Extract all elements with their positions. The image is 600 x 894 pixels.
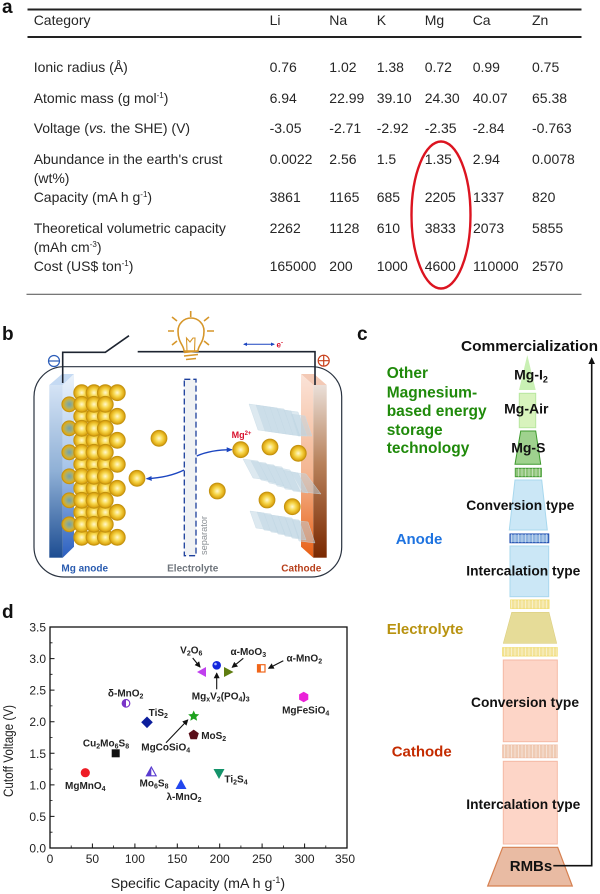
- row: volumetric capacity: 2262: [270, 220, 301, 236]
- marker labels: S: [158, 778, 165, 790]
- y axis tick labels: 3.0: [29, 652, 46, 666]
- category: Electrolyte: Electrolyte: [387, 621, 463, 638]
- marker labels: V: [180, 646, 187, 656]
- cell outline: [34, 367, 342, 577]
- green separator: [515, 468, 541, 477]
- row: cost: [34, 258, 563, 274]
- x axis tick labels: 100: [125, 852, 145, 866]
- row: capacity: 820: [532, 189, 556, 205]
- row: cost: Cost (US$ ton: [34, 258, 122, 274]
- y axis tick labels: 0.0: [29, 842, 46, 856]
- row: capacity: [34, 189, 556, 205]
- category: Anode: Anode: [396, 531, 442, 548]
- row: voltage: [34, 120, 572, 136]
- tier: Mg-I2: [519, 355, 536, 390]
- row: voltage: -2.84: [473, 120, 505, 136]
- tier labels: Mg-S: [511, 439, 545, 455]
- row: cost: 1000: [377, 258, 408, 274]
- row: atomic mass: 65.38: [532, 90, 567, 106]
- row: voltage: -2.92: [377, 120, 409, 136]
- marker labels: 2: [96, 744, 100, 750]
- marker labels: O: [191, 646, 199, 656]
- marker labels: Cu: [83, 738, 96, 750]
- table rules: [26, 8, 582, 295]
- panel label c: c: [357, 324, 368, 345]
- marker labels: 6: [154, 784, 158, 790]
- row: cost: -1: [122, 259, 129, 268]
- row: capacity: Capacity (mA h g: [34, 189, 140, 205]
- tier: Mg-S: [515, 431, 541, 464]
- panel a: comparison table: [2, 0, 582, 295]
- marker: Mo6S8: [146, 767, 156, 776]
- x axis tick labels: 350: [335, 852, 355, 866]
- tier labels: [466, 366, 581, 875]
- row: atomic mass: 40.07: [473, 90, 508, 106]
- row: ionic radius: 1.38: [377, 59, 404, 75]
- row: cost: 110000: [473, 258, 519, 274]
- cathode separator: [503, 745, 557, 758]
- marker labels: 2: [217, 696, 221, 704]
- tier labels: Mg-Air: [504, 400, 549, 416]
- marker: alpha-MoO3: [224, 667, 234, 677]
- row: volumetric capacity: 2073: [473, 220, 504, 236]
- category: other Mg energy storage: technology: [387, 440, 470, 457]
- category: other Mg energy storage: storage: [387, 422, 443, 439]
- x axis tick labels: [47, 852, 355, 866]
- tier labels: RMBs: [510, 858, 552, 875]
- row: atomic mass: 39.10: [377, 90, 412, 106]
- row: volumetric capacity: [34, 220, 563, 255]
- panel label d: d: [2, 602, 14, 623]
- marker: MgCoSiO4 star: [188, 710, 199, 721]
- x axis tick labels: 200: [210, 852, 230, 866]
- row: abundance: Abundance in the earth's crust: [34, 151, 222, 167]
- header row: Zn: [532, 12, 548, 28]
- row: ionic radius: 1.02: [329, 59, 357, 75]
- tier: Mg-Air: [519, 393, 536, 428]
- category: other Mg energy storage: [387, 365, 487, 457]
- row: abundance: 2.94: [473, 151, 500, 167]
- row: voltage: -3.05: [270, 120, 302, 136]
- row: cost: 165000: [270, 258, 317, 274]
- marker labels: 4: [325, 710, 329, 718]
- row: atomic mass: ): [164, 90, 168, 106]
- marker labels: [65, 646, 329, 804]
- tier labels: Intercalation type: [466, 564, 581, 578]
- marker: MgxV2(PO4)3: [212, 661, 221, 670]
- x axis title: ): [280, 876, 285, 892]
- marker arrows: [166, 658, 283, 743]
- x axis tick labels: 50: [86, 852, 99, 866]
- marker labels: S: [237, 774, 244, 786]
- panel b: battery schematic: [2, 311, 342, 577]
- cathode plate: [301, 374, 327, 558]
- yellow separator upper: [511, 600, 549, 608]
- tier labels: Mg-I: [514, 366, 543, 382]
- category: other Mg energy storage: Other: [387, 365, 428, 382]
- header row: Category: [34, 12, 91, 28]
- marker labels: λ-MnO: [166, 792, 198, 803]
- separator: [184, 379, 196, 556]
- marker labels: S: [119, 738, 126, 750]
- icon: light bulb: [168, 311, 214, 360]
- row: abundance: 1.35: [425, 151, 452, 167]
- row: ionic radius: [34, 59, 559, 75]
- yellow separator lower: [503, 648, 557, 656]
- x axis tick labels: 300: [295, 852, 315, 866]
- Mg anode label: Mg anode: [61, 564, 108, 574]
- tier: cathode conversion: [503, 660, 557, 742]
- row: volumetric capacity: -3: [90, 240, 97, 249]
- panel d: scatter chart: [0, 602, 355, 892]
- data markers: [81, 661, 308, 789]
- row: cost: 2570: [532, 258, 563, 274]
- row: voltage: -0.763: [532, 120, 572, 136]
- marker: MoS2: [189, 730, 199, 739]
- row: atomic mass: 22.99: [329, 90, 365, 106]
- marker labels: 2: [187, 650, 191, 658]
- marker labels: α-MnO: [286, 654, 318, 664]
- marker labels: 3: [262, 652, 266, 659]
- tier labels: Conversion type: [466, 498, 575, 513]
- anode plate: [49, 374, 74, 558]
- x axis tick labels: 0: [47, 852, 54, 866]
- y axis tick labels: 2.5: [29, 684, 46, 698]
- cathode host layers: [243, 404, 321, 543]
- marker labels: 4: [102, 786, 106, 793]
- tier: cathode intercalation: [503, 761, 557, 844]
- row: abundance: 0.0078: [532, 151, 575, 167]
- row: voltage: -2.71: [329, 120, 361, 136]
- marker: Ti2S4: [214, 769, 224, 779]
- row: atomic mass: -1: [157, 91, 164, 100]
- minus terminal: [48, 356, 60, 366]
- Commercialization heading: Commercialization: [461, 338, 598, 355]
- row: volumetric capacity: Theoretical volumetric capacity: [34, 220, 226, 236]
- row: capacity: 2205: [425, 189, 456, 205]
- marker labels: 2: [164, 713, 168, 720]
- Cathode label: Cathode: [281, 564, 322, 574]
- marker labels: MgFeSiO: [282, 706, 325, 716]
- row: volumetric capacity: 610: [377, 220, 400, 236]
- tier: anode intercalation: [510, 546, 549, 597]
- marker labels: 2: [318, 658, 322, 666]
- y axis tick labels: 0.5: [29, 810, 46, 824]
- row: capacity: 1165: [329, 189, 360, 205]
- y axis tick labels: 1.5: [29, 747, 46, 761]
- anode magnesium atoms: [62, 385, 125, 545]
- tier labels: Intercalation type: [466, 797, 581, 812]
- marker labels: 8: [125, 744, 129, 750]
- tier: RMBs base: [488, 847, 572, 886]
- row: ionic radius: 0.72: [425, 59, 452, 75]
- marker labels: 4: [244, 780, 248, 786]
- Electrolyte label: Electrolyte: [167, 564, 219, 574]
- marker labels: Mo: [100, 738, 115, 750]
- x axis title: -1: [272, 875, 280, 885]
- marker labels: MgCoSiO: [141, 742, 186, 754]
- y axis tick labels: [29, 620, 46, 856]
- tier labels: 2: [543, 374, 548, 384]
- row: capacity: 685: [377, 189, 400, 205]
- row: atomic mass: 6.94: [270, 90, 297, 106]
- x axis tick labels: 150: [167, 852, 188, 866]
- row: cost: 4600: [425, 258, 456, 274]
- tier: anode conversion: [509, 480, 547, 530]
- Mg2+ label: Mg: [232, 430, 245, 440]
- row: volumetric capacity: 1128: [329, 220, 360, 236]
- row: abundance: 2.56: [329, 151, 357, 167]
- y axis tick labels: 3.5: [29, 620, 46, 634]
- row: volumetric capacity: ): [97, 239, 101, 255]
- marker labels: α-MoO: [230, 647, 262, 658]
- marker labels: (PO: [221, 692, 239, 702]
- header row: Ca: [473, 12, 491, 28]
- y axis tick labels: 2.0: [29, 715, 46, 729]
- separator label: separator: [199, 516, 209, 555]
- marker: Cu2Mo6S8: [112, 749, 120, 757]
- electron flow arrow: e: [276, 340, 281, 350]
- row: atomic mass: Atomic mass (g mol: [34, 90, 157, 106]
- row: volumetric capacity: 5855: [532, 220, 563, 236]
- panel label b: b: [2, 324, 14, 345]
- marker: V2O5: [197, 667, 206, 677]
- marker labels: V: [210, 692, 217, 702]
- marker labels: 6: [199, 650, 203, 658]
- marker labels: x: [206, 696, 210, 704]
- row: capacity: -1: [140, 190, 148, 199]
- electron flow arrow: -: [281, 340, 283, 346]
- anode separator: [510, 534, 549, 543]
- row: cost: ): [129, 258, 133, 274]
- marker labels: 2: [222, 736, 226, 743]
- header row: K: [377, 12, 387, 28]
- category: other Mg energy storage: Magnesium-: [387, 384, 477, 402]
- row: abundance: [34, 151, 575, 186]
- row: voltage: -2.35: [425, 120, 457, 136]
- row: capacity: 3861: [270, 189, 301, 205]
- x axis tick labels: 250: [252, 852, 272, 866]
- y axis title: Cutoff Voltage (V): [0, 705, 16, 797]
- panel c: commercialization pyramid: [357, 324, 598, 886]
- category: Cathode: Cathode: [392, 744, 452, 760]
- axes frame and ticks: [50, 627, 347, 848]
- marker labels: 2: [140, 694, 144, 700]
- marker: lambda-MnO2: [176, 779, 186, 789]
- marker labels: 2: [198, 797, 202, 804]
- row: voltage: Voltage (vs. the SHE) (V): [34, 120, 190, 136]
- row: ionic radius: 0.99: [473, 59, 500, 75]
- row: abundance: 1.5: [377, 151, 396, 167]
- marker labels: TiS: [149, 708, 164, 719]
- row: atomic mass: [34, 90, 567, 106]
- row: volumetric capacity: 3833: [425, 220, 456, 236]
- free magnesium ions: [129, 430, 306, 515]
- marker: alpha-MnO2: [258, 665, 265, 672]
- row: ionic radius: 0.76: [270, 59, 297, 75]
- y axis tick labels: 1.0: [29, 778, 46, 792]
- marker labels: Ti: [224, 774, 233, 786]
- row: ionic radius: 0.75: [532, 59, 559, 75]
- marker labels: ): [242, 692, 246, 702]
- red ellipse highlighting Mg column: [412, 142, 470, 288]
- Mg2+ label: 2+: [245, 431, 252, 437]
- row: ionic radius: Ionic radius (Å): [34, 59, 128, 75]
- row: capacity: 1337: [473, 189, 504, 205]
- row: volumetric capacity: (mAh cm: [34, 239, 90, 255]
- row: abundance: 0.0022: [270, 151, 313, 167]
- marker labels: Mg: [192, 692, 206, 702]
- x axis title: Specific Capacity (mA h g: [111, 876, 272, 892]
- marker labels: MgMnO: [65, 781, 102, 792]
- row: cost: 200: [329, 258, 353, 274]
- marker labels: δ-MnO: [108, 688, 140, 700]
- electron flow arrow: [243, 340, 283, 350]
- marker: delta-MnO2: [122, 700, 130, 707]
- arrow: RMBs to commercialization: [553, 357, 595, 866]
- header row: Li: [270, 12, 281, 28]
- marker: MgMnO4: [81, 768, 90, 777]
- tier: electrolyte: [503, 612, 557, 643]
- marker: TiS2: [141, 716, 153, 728]
- marker labels: 6: [115, 744, 119, 750]
- tier labels: Conversion type: [471, 695, 579, 710]
- row: abundance: (wt%): [34, 170, 69, 186]
- marker labels: MoS: [201, 731, 222, 742]
- external circuit with switch: [63, 336, 315, 385]
- marker labels: 8: [165, 784, 169, 790]
- header row: [34, 12, 548, 28]
- marker labels: 4: [186, 748, 190, 754]
- marker labels: 4: [238, 696, 242, 704]
- plus terminal: [318, 355, 329, 366]
- ion flow arrows: [147, 450, 232, 479]
- row: atomic mass: 24.30: [425, 90, 460, 106]
- row: capacity: ): [147, 189, 152, 205]
- marker labels: Mo: [140, 778, 154, 790]
- header row: Na: [329, 12, 347, 28]
- marker labels: 3: [246, 696, 250, 704]
- marker: MgFeSiO4: [299, 692, 308, 702]
- header row: Mg: [425, 12, 444, 28]
- marker labels: 2: [233, 780, 237, 786]
- category: other Mg energy storage: based energy: [387, 403, 487, 420]
